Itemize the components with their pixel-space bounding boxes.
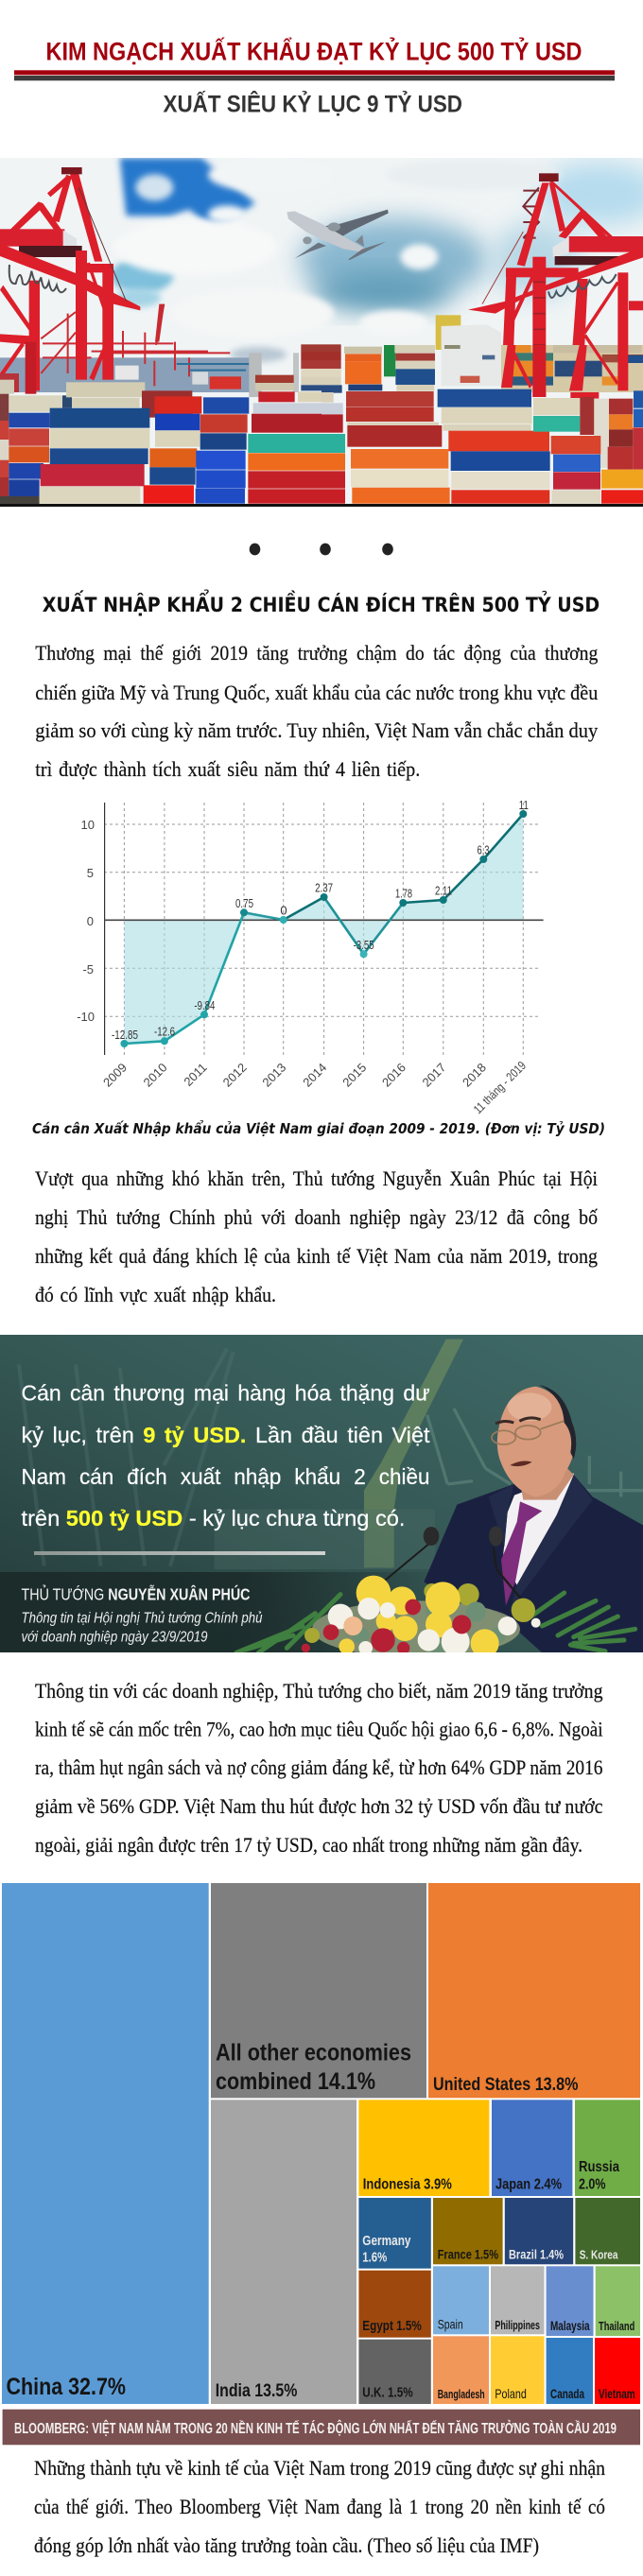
data line (124, 814, 523, 1044)
x axis labels: 2011 (181, 1061, 210, 1089)
tile: Germany: Germany (362, 2234, 410, 2249)
tile: all other economies (211, 1883, 426, 2098)
tile: Germany: 1.6% (362, 2251, 387, 2266)
data labels: 11 (519, 798, 529, 812)
tile: South Korea: S. Korea (580, 2247, 618, 2261)
tile: Russia: Russia (579, 2159, 619, 2175)
caption strip (0, 1572, 444, 1652)
data labels: -3.55 (354, 938, 374, 952)
right crane (468, 173, 643, 399)
data labels: 1.78 (395, 887, 412, 901)
y axis labels: 10 (81, 818, 95, 832)
plane (287, 210, 389, 260)
x axis labels: 2012 (220, 1061, 250, 1090)
y axis labels: -5 (82, 962, 94, 977)
suit and shirt (424, 1473, 643, 1652)
Bloomberg headline bar (3, 2410, 640, 2445)
tile: China: China 32.7% (6, 2374, 126, 2400)
quote text (21, 1381, 430, 1530)
chart grid (104, 803, 541, 1055)
sky (0, 156, 643, 506)
paragraph 1: giảm so với cùng kỳ năm trước. Tuy nhiên, Việt Nam vẫn chắc chắn duy (35, 718, 598, 742)
attribution: Thông tin tại Hội nghị Thủ tướng Chính phủ (21, 1611, 263, 1627)
y axis labels: 0 (87, 914, 94, 928)
tile: all other economies: All other economies (216, 2039, 411, 2066)
quote text: kỷ lục, trên 9 tỷ USD. Lần đầu tiên Việt (21, 1423, 430, 1447)
tile: India (211, 2100, 356, 2404)
data labels (112, 798, 529, 1042)
tile: Philippines (491, 2266, 545, 2334)
tile: India: India 13.5% (216, 2381, 297, 2401)
x axis labels: 2010 (141, 1061, 170, 1090)
containers: left half (0, 344, 322, 506)
paragraph 2: đó có lĩnh vực xuất nhập khẩu. (35, 1283, 276, 1306)
data markers (120, 810, 527, 1047)
tile: Indonesia: Indonesia 3.9% (363, 2177, 452, 2193)
quote rule (34, 1551, 325, 1555)
quote text: trên 500 tỷ USD - kỷ lục chưa từng có. (21, 1506, 405, 1530)
tile: Bangladesh: Bangladesh (438, 2388, 485, 2401)
y axis labels: 5 (87, 866, 94, 880)
data labels: -12.6 (154, 1025, 175, 1039)
tile: Egypt (358, 2271, 431, 2338)
x axis labels: 2018 (460, 1061, 489, 1090)
tile: Thailand (596, 2266, 640, 2336)
paragraph 4: đóng góp lớn nhất vào tăng trưởng toàn cầu. (Theo số liệu của IMF) (34, 2533, 539, 2557)
tile: Vietnam (595, 2338, 640, 2404)
x axis labels: 2015 (339, 1061, 369, 1090)
tile: Russia: 2.0% (579, 2177, 606, 2193)
tile: China (2, 1883, 209, 2404)
tile: Indonesia (358, 2100, 489, 2196)
y axis labels (77, 818, 95, 1024)
photo bottom line (0, 504, 643, 507)
tile: France: France 1.5% (438, 2246, 498, 2261)
data labels: 2.37 (315, 880, 333, 894)
data labels: -9.84 (194, 998, 215, 1012)
line chart: trade balance 2009-2019 (77, 798, 544, 1116)
x axis labels (100, 1059, 529, 1116)
redraw right crane lower legs over backdrop (501, 345, 515, 388)
tile: Germany (358, 2198, 431, 2269)
tile: all other economies: combined 14.1% (216, 2068, 375, 2095)
area fill (124, 814, 523, 1044)
y axis labels: -10 (77, 1010, 95, 1024)
paragraph 4 (34, 2456, 605, 2557)
quote banner (0, 1335, 643, 1657)
paragraph 3: ngoài, giải ngân được trên 17 tỷ USD, cao nhất trong những năm gần đây. (35, 1833, 582, 1857)
attribution (21, 1584, 263, 1646)
microphones (381, 1526, 525, 1603)
x axis labels: 2014 (300, 1061, 329, 1090)
quote text: Nam cán đích xuất nhập khẩu 2 chiều (21, 1464, 429, 1489)
paragraph 1 (35, 641, 598, 781)
right background containers (501, 335, 643, 397)
treemap: contribution to global growth (2, 1883, 640, 2404)
tile: Poland: Poland (495, 2386, 527, 2401)
tile: Brazil: Brazil 1.4% (509, 2246, 564, 2261)
tile: France (433, 2198, 503, 2264)
hero photo: port cranes, containers and plane (0, 156, 643, 506)
head (492, 1385, 576, 1500)
tile: United States: United States 13.8% (433, 2075, 579, 2095)
section heading: XUẤT NHẬP KHẨU 2 CHIỀU CÁN ĐÍCH TRÊN 500 TỶ USD (43, 590, 600, 616)
title: KIM NGẠCH XUẤT KHẨU ĐẠT KỶ LỤC 500 TỶ USD (45, 38, 582, 66)
tile: Japan (492, 2100, 572, 2196)
tile: UK: U.K. 1.5% (362, 2386, 413, 2401)
tile: Canada: Canada (550, 2387, 584, 2401)
tile: Egypt: Egypt 1.5% (362, 2319, 422, 2334)
data labels: -12.85 (112, 1028, 138, 1042)
data labels: 0.75 (235, 896, 253, 910)
background port cranes (19, 1340, 643, 1569)
paragraph 1: chiến giữa Mỹ và Trung Quốc, xuất khẩu của các nước trong khu vực đều (35, 681, 598, 704)
tile: Bangladesh (433, 2336, 489, 2404)
tile: South Korea (575, 2198, 640, 2264)
tile: Japan: Japan 2.4% (495, 2177, 562, 2193)
tile: Canada (547, 2338, 593, 2404)
three dots divider (250, 544, 393, 555)
tile: Poland (491, 2336, 545, 2404)
ship superstructure behind containers (436, 315, 501, 386)
x axis labels: 2017 (419, 1061, 449, 1090)
data labels: 6.3 (477, 842, 490, 856)
subtitle: XUẤT SIÊU KỶ LỤC 9 TỶ USD (163, 89, 462, 117)
tile: Spain: Spain (438, 2317, 463, 2331)
left crane (0, 167, 140, 394)
tile: Malaysia (547, 2266, 594, 2336)
flower arrangement (236, 1576, 635, 1657)
data labels: 0 (280, 904, 287, 918)
portrait: prime minister at podium with flowers (236, 1385, 643, 1657)
tile: Malaysia: Malaysia (550, 2319, 590, 2333)
chart caption: Cán cân Xuất Nhập khẩu của Việt Nam giai đoạn 2009 - 2019. (Đơn vị: Tỷ USD) (32, 1119, 605, 1137)
title rule (14, 70, 615, 80)
tile: Brazil (505, 2198, 573, 2264)
paragraph 1: trì được thành tích xuất siêu năm thứ 4 liên tiếp. (35, 757, 420, 781)
containers: right half (322, 344, 643, 504)
quote text: Cán cân thương mại hàng hóa thặng dư (21, 1381, 429, 1406)
paragraph 2: những kết quả đáng khích lệ của kinh tế Việt Nam của năm 2019, trong (35, 1244, 598, 1268)
paragraph 3 (35, 1679, 603, 1857)
distant port and cranes (0, 304, 252, 392)
paragraph 2: nghị Thủ tướng Chính phủ với doanh nghiệp ngày 23/12 đã công bố (35, 1205, 598, 1229)
x axis labels: 2013 (259, 1061, 288, 1090)
tile: Philippines: Philippines (495, 2319, 540, 2332)
tile: Russia (575, 2100, 640, 2196)
tile: UK (358, 2340, 431, 2404)
attribution: THỦ TƯỚNG NGUYỄN XUÂN PHÚC (21, 1584, 251, 1604)
x axis labels: 2009 (100, 1061, 130, 1090)
data labels: 2.11 (435, 884, 452, 898)
attribution: với doanh nghiệp ngày 23/9/2019 (21, 1630, 208, 1646)
paragraph 2 (35, 1167, 598, 1306)
axes (104, 803, 544, 1055)
tile: United States (428, 1883, 640, 2098)
tile: Spain (433, 2266, 489, 2334)
x axis labels: 2016 (379, 1061, 408, 1090)
x axis labels: 11 tháng - 2019 (471, 1059, 529, 1116)
